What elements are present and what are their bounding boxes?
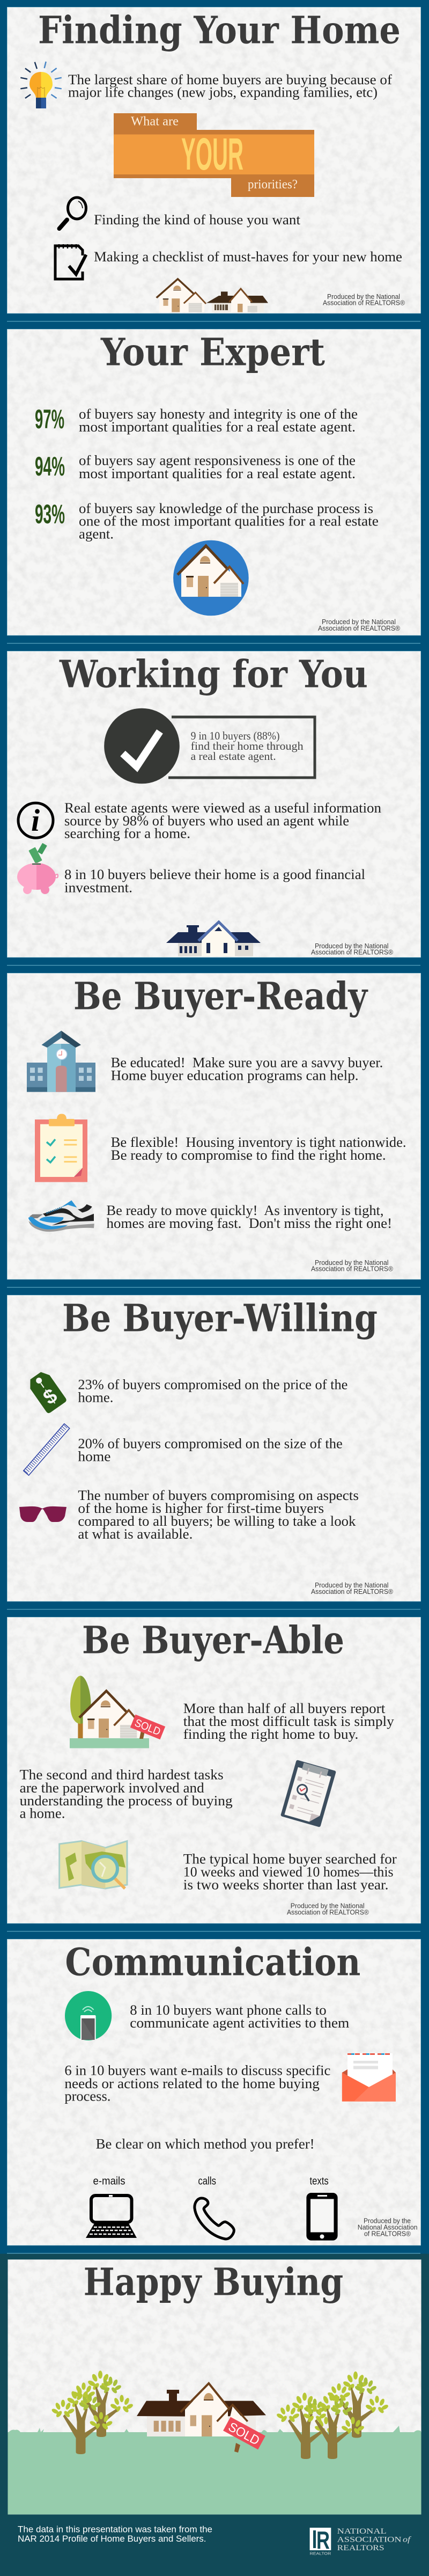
panel: Happy Buying [8, 2259, 421, 2514]
text: size compromise: 20% of buyers compromised on the size of the [78, 1436, 343, 1451]
icon: magnifying glass [59, 197, 86, 229]
callout: 9 in 10 buyers: 9 in 10 buyers (88%) [191, 729, 280, 742]
text: price compromise: 23% of buyers compromised on the price of the [78, 1377, 347, 1392]
heading: Working for You: Working for You [59, 652, 368, 696]
panel: Finding Your Home [8, 8, 420, 313]
text: most difficult task: finding the right home to buy. [183, 1726, 358, 1742]
callout: 9 in 10 buyers: find their home through [191, 740, 304, 752]
icon: map and magnifier [60, 1841, 127, 1889]
text: be educated: Be educated! Make sure you are a savvy buyer. [111, 1055, 383, 1070]
text: size compromise [78, 1436, 343, 1465]
text: useful information source: searching for a home. [64, 826, 190, 841]
text: typical home buyer search: is two weeks shorter than last year. [183, 1877, 388, 1892]
text: most difficult task: that the most difficult task is simply [183, 1714, 394, 1729]
credit: Association of REALTORS® [311, 948, 393, 956]
credit: of REALTORS® [364, 2229, 411, 2237]
text: first-time buyers: The number of buyers compromising on aspects [78, 1488, 359, 1503]
credit [358, 2217, 418, 2237]
icon: clipboard with magnifier [280, 1760, 336, 1827]
text: move quickly: homes are moving fast. Don't miss the right one! [106, 1216, 392, 1231]
banner: what are your priorities: YOUR [181, 129, 243, 179]
icon: phone in green circle [65, 1991, 112, 2040]
icon: clipboard [35, 1114, 87, 1182]
text: purchase process: one of the most important qualities for a real estate [79, 514, 379, 529]
credit [311, 942, 393, 956]
method: e-mails: e-mails [93, 2176, 125, 2187]
text: price compromise: home. [78, 1389, 113, 1405]
text: be flexible: Be flexible! Housing inventory is tight nationwide. [111, 1135, 406, 1150]
logo: National Association of Realtors: REALTORS [337, 2544, 384, 2552]
callout: 9 in 10 buyers: a real estate agent. [191, 750, 276, 763]
text: e-mails [64, 2063, 330, 2104]
text: useful information source: source by 98% of buyers who used an agent while [64, 813, 349, 829]
heading: Your Expert: Your Expert [100, 330, 325, 374]
credit [311, 1581, 393, 1596]
icon: envelope [342, 2053, 396, 2102]
credit: Association of REALTORS® [311, 1587, 393, 1596]
credit: Association of REALTORS® [311, 1265, 393, 1273]
text: agent responsiveness [79, 453, 356, 481]
credit [318, 618, 400, 632]
text: life changes [68, 72, 392, 100]
text: be flexible [111, 1135, 406, 1163]
text: honesty and integrity: most important qualities for a real estate agent. [79, 419, 356, 435]
logo: National Association of Realtors: R [316, 2526, 330, 2554]
footer: data source: The data in this presentation was taken from the [18, 2525, 212, 2535]
icon: sunglasses [19, 1506, 66, 1522]
footer: data source [18, 2525, 212, 2544]
text: e-mails: process. [64, 2089, 110, 2104]
method: texts [306, 2176, 338, 2241]
text: be flexible: Be ready to compromise to find the right home. [111, 1147, 386, 1163]
illustration: sold house with tree: SOLD [133, 1717, 162, 1738]
text: second and third hardest tasks: are the paperwork involved and [20, 1780, 204, 1796]
icon: ruler [24, 1424, 70, 1475]
stat: 97%: 97% [35, 404, 64, 434]
text: phone calls [130, 2002, 349, 2031]
icon: info: i [31, 803, 40, 838]
text: useful information source: Real estate agents were viewed as a useful information [64, 800, 381, 816]
icon: running shoe [28, 1201, 94, 1232]
logo: National Association of Realtors: ASSOCIATION [337, 2535, 402, 2544]
text: first-time buyers: compared to all buyers; be willing to take a look [78, 1513, 356, 1529]
text: agent responsiveness: of buyers say agent responsiveness is one of the [79, 453, 356, 469]
text: good financial investment [64, 867, 365, 895]
text: phone calls: communicate agent activities to them [130, 2015, 349, 2031]
illustration: house with sold sign [137, 2383, 266, 2453]
text: typical home buyer search: 10 weeks and viewed 10 homes—this [183, 1864, 394, 1880]
text: size compromise: home [78, 1449, 110, 1465]
text: honesty and integrity [79, 406, 358, 435]
text: second and third hardest tasks: a home. [20, 1806, 65, 1821]
banner: what are your priorities [114, 113, 314, 197]
panel: Be Buyer-Ready [8, 974, 420, 1279]
logo: National Association of Realtors: of [403, 2535, 411, 2544]
credit [323, 292, 405, 307]
credit: Association of REALTORS® [318, 624, 400, 632]
text: second and third hardest tasks: The second and third hardest tasks [20, 1767, 224, 1783]
icon: checklist [55, 244, 86, 279]
method: e-mails [86, 2176, 137, 2238]
icon: info [18, 803, 53, 838]
logo: National Association of Realtors: REALTOR [310, 2552, 331, 2556]
text: first-time buyers: of the home is higher for first-time buyers [78, 1501, 324, 1516]
ground [8, 2426, 421, 2514]
credit: Produced by the National [322, 618, 396, 626]
icon: lightbulb [20, 62, 62, 108]
icon: price tag [26, 1369, 68, 1414]
text: be educated [111, 1055, 383, 1083]
text: good financial investment: 8 in 10 buyers believe their home is a good financial [64, 867, 365, 882]
credit: Produced by the [364, 2217, 411, 2225]
banner: what are your priorities: priorities? [248, 178, 298, 192]
stat: 93%: 93% [35, 499, 65, 529]
credit: Association of REALTORS® [323, 299, 405, 307]
panel: Communication [8, 1940, 420, 2245]
illustration: sold house with tree [70, 1675, 165, 1748]
panel: Be Buyer-Willing [8, 1296, 420, 1601]
text: e-mails: needs or actions related to the home buying [64, 2076, 320, 2091]
heading: Be Buyer-Ready: Be Buyer-Ready [73, 974, 368, 1018]
illustration: navy house [166, 922, 261, 956]
illustration: two houses [157, 279, 268, 312]
callout: 9 in 10 buyers [104, 708, 315, 784]
text: second and third hardest tasks: understanding the process of buying [20, 1793, 233, 1809]
heading: Happy Buying: Happy Buying [84, 2259, 343, 2304]
icon: piggy bank [17, 843, 58, 894]
text: be clear: Be clear on which method you prefer! [96, 2136, 315, 2152]
text: price compromise [78, 1377, 347, 1405]
text: second and third hardest tasks [20, 1767, 233, 1821]
credit: National Association [358, 2223, 418, 2231]
text: most difficult task [183, 1701, 394, 1742]
panel: Your Expert [8, 330, 420, 635]
text: move quickly [106, 1203, 392, 1231]
heading: Communication: Communication [65, 1940, 360, 1984]
credit: Produced by the National [315, 1258, 389, 1267]
text: be educated: Home buyer education programs can help. [111, 1067, 359, 1083]
illustration: house with sold sign: SOLD [226, 2420, 262, 2448]
text: life changes: major life changes (new jobs, expanding families, etc) [68, 85, 378, 100]
panel: Working for You [8, 652, 420, 957]
text: finding the kind of house: Finding the kind of house you want [94, 212, 301, 228]
text: purchase process: of buyers say knowledge of the purchase process is [79, 501, 373, 516]
text: e-mails: 6 in 10 buyers want e-mails to discuss specific [64, 2063, 330, 2079]
text: honesty and integrity: of buyers say honesty and integrity is one of the [79, 406, 358, 422]
panel: Be Buyer-Able [8, 1618, 420, 1923]
method: calls [195, 2176, 234, 2239]
credit: Association of REALTORS® [287, 1908, 369, 1916]
method: texts: texts [310, 2176, 329, 2187]
illustration: trees right [276, 2372, 389, 2459]
stat: 94%: 94% [35, 451, 65, 481]
text: useful information source [64, 800, 381, 841]
credit: Produced by the National [315, 1581, 389, 1589]
icon: school [27, 1030, 95, 1092]
text: agent responsiveness: most important qualities for a real estate agent. [79, 466, 356, 481]
text: first-time buyers [78, 1488, 359, 1542]
icon: price tag: $ [39, 1385, 62, 1409]
heading: Be Buyer-Able: Be Buyer-Able [82, 1618, 344, 1662]
text: move quickly: Be ready to move quickly! As inventory is tight, [106, 1203, 384, 1218]
text: good financial investment: investment. [64, 880, 132, 895]
credit: Produced by the National [327, 292, 400, 301]
illustration: trees left [51, 2370, 134, 2454]
credit: Produced by the National [291, 1902, 365, 1910]
text: first-time buyers: at what is available. [78, 1526, 193, 1542]
footer: data source: NAR 2014 Profile of Home Buyers and Sellers. [18, 2534, 206, 2544]
credit: Produced by the National [315, 942, 389, 950]
credit [287, 1902, 369, 1916]
logo: National Association of Realtors [310, 2526, 411, 2556]
banner: what are your priorities: What are [131, 115, 179, 129]
logo: National Association of Realtors: NATIONAL [337, 2527, 387, 2536]
method: calls: calls [198, 2176, 216, 2187]
text: purchase process: agent. [79, 526, 114, 541]
text: most difficult task: More than half of all buyers report [183, 1701, 386, 1716]
text: life changes: The largest share of home buyers are buying because of [68, 72, 392, 87]
text: typical home buyer search: The typical home buyer searched for [183, 1851, 397, 1867]
text: typical home buyer search [183, 1851, 397, 1892]
text: purchase process [79, 501, 379, 541]
icon: house in blue circle [173, 540, 249, 616]
text: phone calls: 8 in 10 buyers want phone calls to [130, 2002, 327, 2018]
credit [311, 1258, 393, 1273]
heading: Be Buyer-Willing: Be Buyer-Willing [62, 1296, 378, 1340]
text: making a checklist: Making a checklist of must-haves for your new home [94, 249, 402, 265]
